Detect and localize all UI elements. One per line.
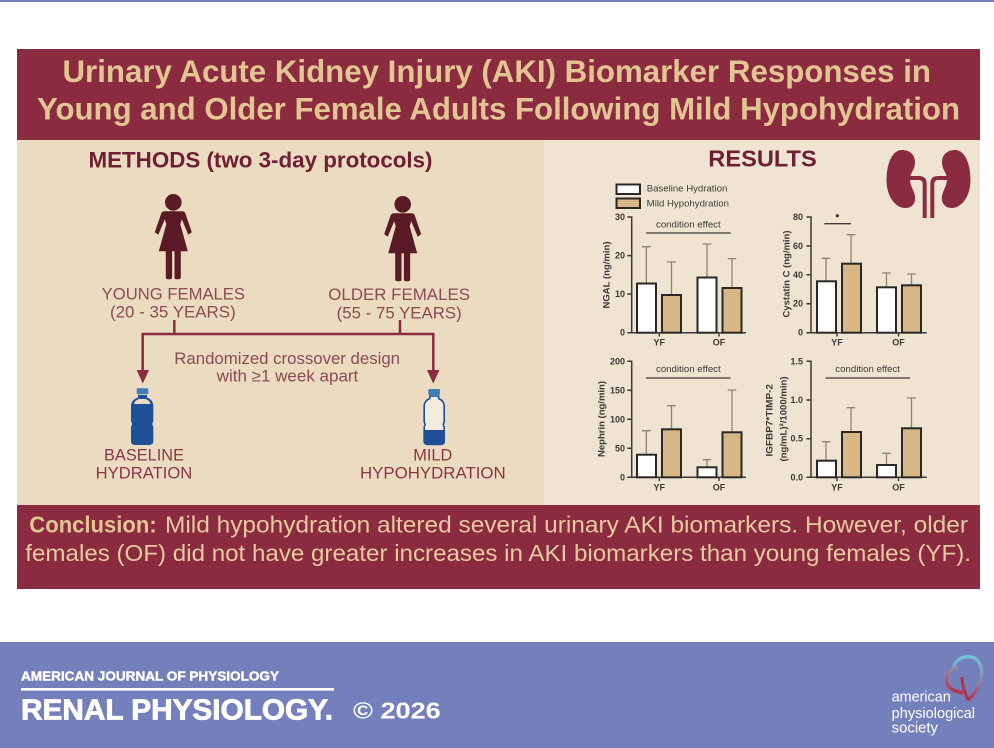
- publisher logo: physiological: [892, 706, 975, 722]
- bar chart: Cystatin C: 20: [793, 299, 803, 309]
- bar chart: Nephrin: 50: [615, 443, 625, 453]
- crossover design text: with ≥1 week apart: [216, 367, 359, 386]
- bar chart: IGFBP7*TIMP-2: 1.0: [790, 395, 803, 405]
- results heading: RESULTS: [708, 146, 817, 172]
- bar chart: Cystatin C: Cystatin C (ng/min): [782, 230, 792, 318]
- bar chart: NGAL: 0: [620, 328, 625, 338]
- bar chart: Cystatin C: YF: [831, 338, 843, 348]
- older females label: [328, 285, 470, 322]
- bar chart: Cystatin C: 0: [798, 328, 803, 338]
- mild hypohydration label: HYPOHYDRATION: [360, 463, 506, 482]
- bar chart: Cystatin C: 40: [793, 270, 803, 280]
- bar chart: Nephrin: condition effect: [656, 364, 721, 375]
- baseline hydration label: BASELINE: [104, 446, 184, 465]
- bar chart: Nephrin: 100: [610, 414, 625, 424]
- panel: methods: [17, 140, 544, 505]
- crossover design text: Randomized crossover design: [174, 349, 400, 368]
- bar chart: Cystatin C: 80: [793, 212, 803, 222]
- bar chart: NGAL: 10: [615, 289, 625, 299]
- mild hypohydration label: MILD: [413, 446, 452, 465]
- older females label: (55 - 75 YEARS): [337, 303, 462, 322]
- bar chart: Cystatin C: 60: [793, 241, 803, 251]
- publisher logo: american: [892, 690, 951, 706]
- bar chart: IGFBP7*TIMP-2: 1.5: [790, 356, 803, 366]
- bar chart: Cystatin C: OF: [892, 338, 905, 348]
- mild hypohydration label: [360, 446, 506, 482]
- bar chart: Nephrin: 200: [610, 356, 625, 366]
- bar chart: NGAL: 30: [615, 212, 625, 222]
- bar chart: IGFBP7*TIMP-2: IGFBP7*TIMP-2: [764, 384, 776, 457]
- journal name: AMERICAN JOURNAL OF PHYSIOLOGY: [21, 670, 280, 684]
- publisher logo: society: [892, 721, 939, 737]
- bar chart: IGFBP7*TIMP-2: 0.5: [790, 434, 803, 444]
- older females label: OLDER FEMALES: [328, 285, 470, 304]
- bar chart: Nephrin: 150: [610, 385, 625, 395]
- icon: full water bottle: [131, 388, 153, 445]
- icon: low water bottle: [423, 389, 445, 445]
- bar chart: Nephrin: 0: [620, 472, 625, 482]
- bar chart: Nephrin: [596, 356, 746, 492]
- baseline hydration label: [96, 446, 192, 482]
- title banner: [17, 49, 980, 140]
- bar chart: IGFBP7*TIMP-2: YF: [831, 482, 843, 492]
- chart legend: Mild Hypohydration: [647, 198, 729, 210]
- conclusion banner: Mild hypohydration altered several urinary AKI biomarkers. However, older: [165, 511, 968, 537]
- conclusion banner: Conclusion:: [29, 511, 157, 537]
- bar chart: IGFBP7*TIMP-2: 0.0: [790, 472, 803, 482]
- icon: kidneys: [886, 150, 970, 218]
- bar chart: IGFBP7*TIMP-2: OF: [892, 482, 905, 492]
- panel: results: [544, 140, 980, 505]
- bar chart: Nephrin: OF: [713, 482, 726, 492]
- journal name: RENAL PHYSIOLOGY.: [21, 694, 333, 726]
- bar chart: NGAL: 20: [615, 251, 625, 261]
- bar chart: Nephrin: YF: [654, 482, 666, 492]
- conclusion banner: [17, 505, 980, 589]
- icon: older female figure: [384, 196, 421, 281]
- chart legend: Baseline Hydration: [647, 184, 727, 195]
- journal name: [21, 670, 441, 726]
- publisher logo: [892, 657, 982, 737]
- footer band: [0, 642, 994, 748]
- bar chart: Cystatin C: [782, 212, 927, 348]
- bar chart: NGAL: NGAL (ng/min): [602, 242, 612, 308]
- title banner: Young and Older Female Adults Following Mild Hypohydration: [37, 90, 960, 126]
- crossover design text: [174, 349, 400, 386]
- young females label: [102, 284, 245, 322]
- bar chart: Nephrin: Nephrin (ng/min): [596, 381, 608, 457]
- bar chart: IGFBP7*TIMP-2: [764, 356, 927, 492]
- bar chart: NGAL: [602, 212, 746, 348]
- bar chart: NGAL: YF: [654, 338, 666, 348]
- chart legend: [616, 184, 729, 210]
- arrows: crossover allocation: [137, 320, 439, 384]
- young females label: (20 - 35 YEARS): [110, 302, 236, 322]
- title banner: Urinary Acute Kidney Injury (AKI) Biomarker Responses in: [62, 53, 931, 89]
- conclusion banner: females (OF) did not have greater increases in AKI biomarkers than young females (YF).: [25, 540, 971, 566]
- journal name: © 2026: [353, 698, 441, 724]
- bar chart: NGAL: condition effect: [656, 219, 721, 230]
- bar chart: IGFBP7*TIMP-2: condition effect: [835, 364, 900, 375]
- icon: young female figure: [155, 194, 192, 279]
- methods heading: METHODS (two 3-day protocols): [88, 148, 432, 172]
- bar chart: IGFBP7*TIMP-2: (ng/mL)²/1000/min): [778, 376, 790, 462]
- baseline hydration label: HYDRATION: [96, 463, 192, 482]
- young females label: YOUNG FEMALES: [102, 284, 245, 304]
- bar chart: NGAL: OF: [713, 338, 726, 348]
